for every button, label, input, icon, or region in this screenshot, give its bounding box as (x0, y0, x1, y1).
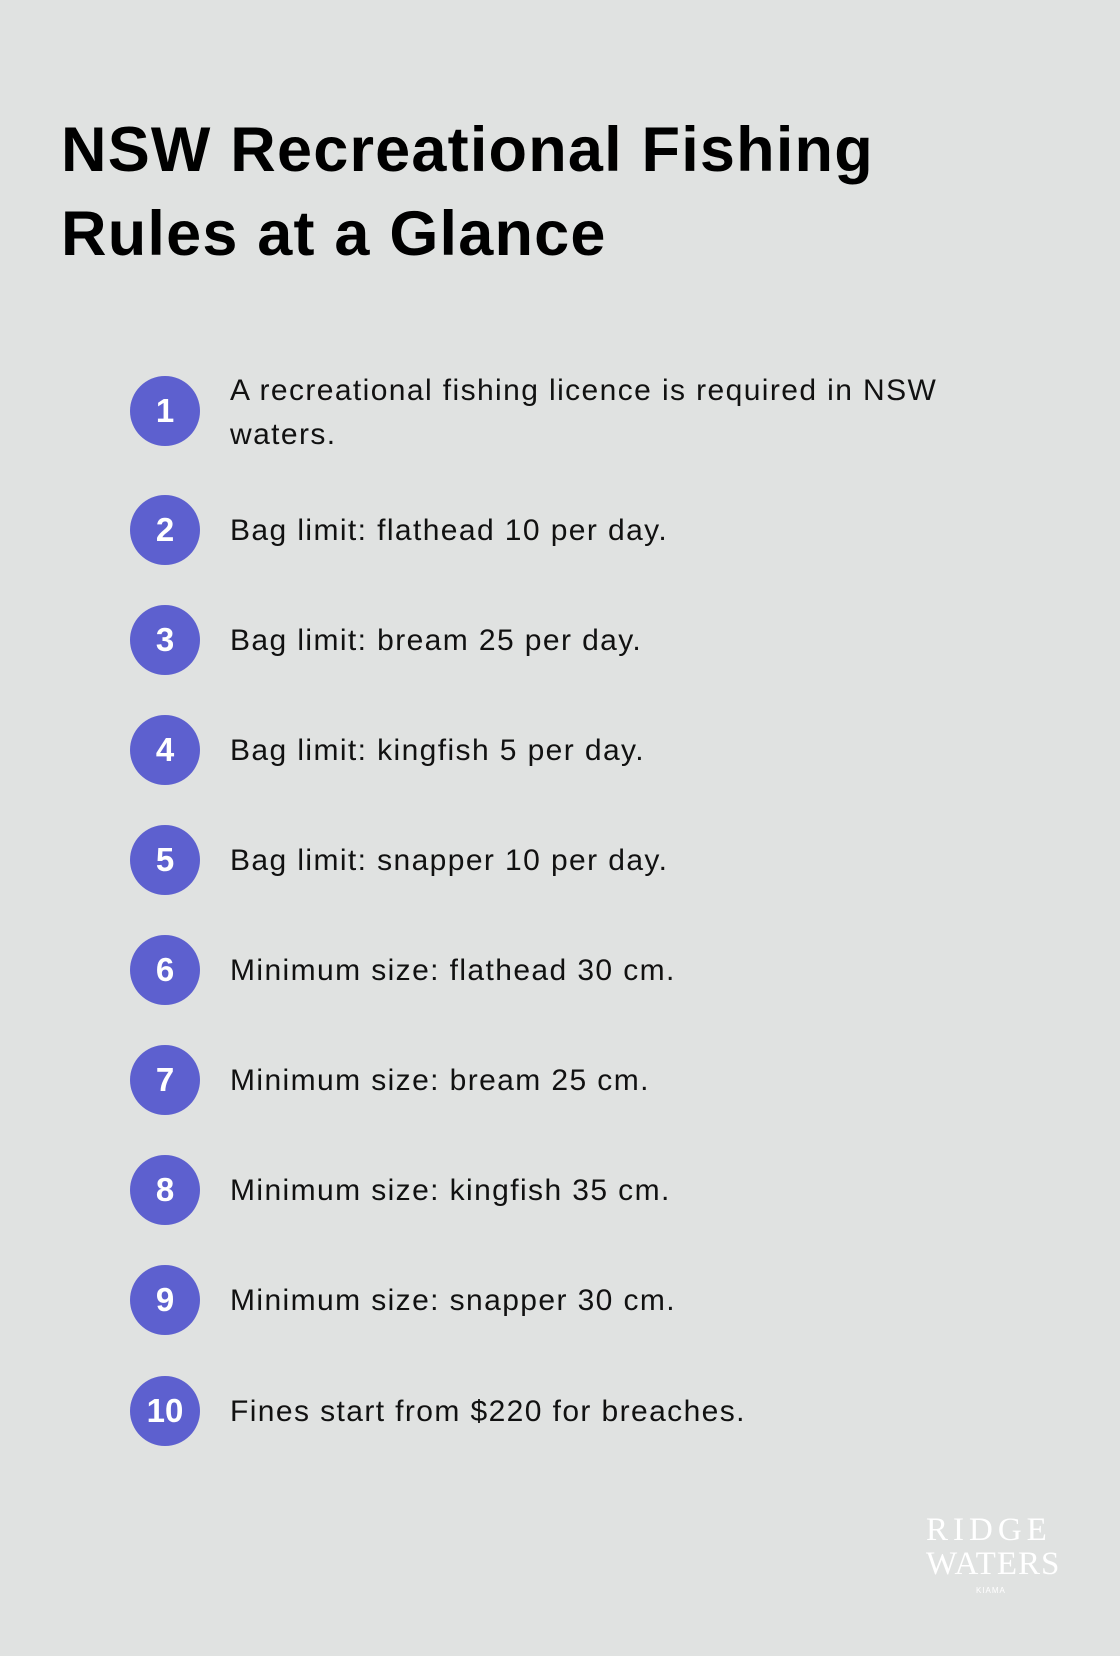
logo: KIAMA (976, 1586, 1006, 1595)
item 3: Bag limit: bream 25 per day. (230, 624, 642, 657)
item 2 (130, 495, 668, 565)
item 3 (130, 605, 642, 675)
item 4: 4 (156, 731, 174, 768)
item 1: A recreational fishing licence is required in NSW (230, 374, 937, 407)
item 2: 2 (156, 511, 174, 548)
item 4 (130, 715, 645, 785)
item 3: 3 (156, 621, 174, 658)
item 6: Minimum size: flathead 30 cm. (230, 954, 676, 987)
item 10: 10 (147, 1392, 183, 1429)
item 1: waters. (230, 418, 336, 451)
item 8: 8 (156, 1171, 174, 1208)
item 8: Minimum size: kingfish 35 cm. (230, 1174, 671, 1207)
item 8 (130, 1155, 671, 1225)
item 5: Bag limit: snapper 10 per day. (230, 844, 668, 877)
item 7: 7 (156, 1061, 174, 1098)
item 4: Bag limit: kingfish 5 per day. (230, 734, 645, 767)
title: Rules at a Glance (61, 199, 607, 269)
item 2: Bag limit: flathead 10 per day. (230, 514, 668, 547)
item 6 (130, 935, 676, 1005)
item 5 (130, 825, 668, 895)
logo: WATERS (926, 1546, 1060, 1582)
item 1 (130, 374, 937, 451)
logo (926, 1512, 1060, 1595)
item 6: 6 (156, 951, 174, 988)
item 7: Minimum size: bream 25 cm. (230, 1064, 650, 1097)
item 7 (130, 1045, 650, 1115)
item 9: Minimum size: snapper 30 cm. (230, 1284, 676, 1317)
item 9 (130, 1265, 676, 1335)
item 1: 1 (156, 392, 174, 429)
logo: RIDGE (926, 1512, 1052, 1548)
title: NSW Recreational Fishing (61, 115, 874, 185)
item 10 (130, 1376, 746, 1446)
item 5: 5 (156, 841, 174, 878)
item 9: 9 (156, 1281, 174, 1318)
item 10: Fines start from $220 for breaches. (230, 1395, 746, 1428)
title (61, 115, 874, 269)
